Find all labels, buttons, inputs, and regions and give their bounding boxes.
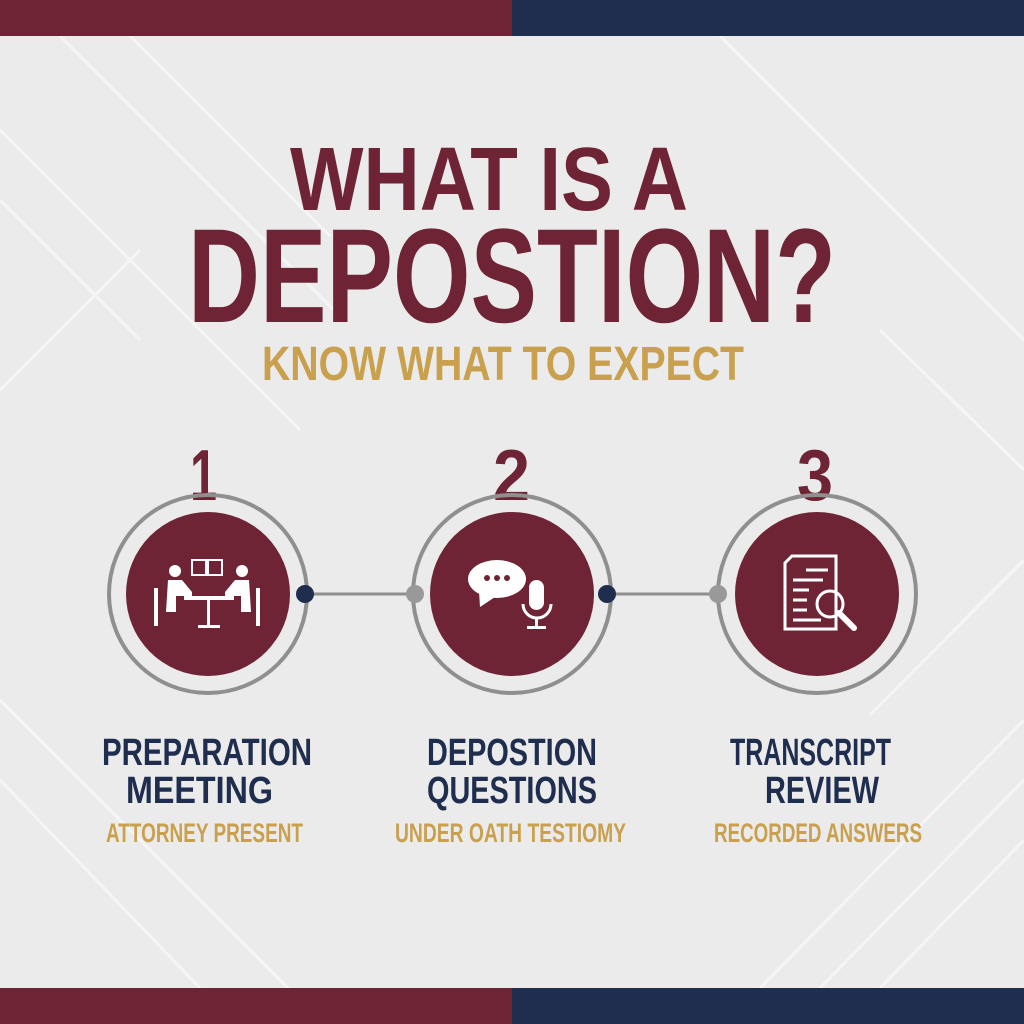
connector lines <box>305 592 718 596</box>
step 2: 2 <box>493 436 530 516</box>
label 1: PREPARATION <box>102 732 312 774</box>
label 1: ATTORNEY PRESENT <box>106 818 303 848</box>
step 1: 1 <box>190 436 217 516</box>
connector dots <box>296 585 727 603</box>
bottom bar <box>0 988 1024 1024</box>
label 1 <box>102 732 312 848</box>
label 3 <box>714 732 922 848</box>
subtitle: KNOW WHAT TO EXPECT <box>262 338 744 391</box>
title: WHAT IS A <box>290 130 688 230</box>
label 3: TRANSCRIPT <box>730 732 891 774</box>
label 1: MEETING <box>126 770 273 812</box>
label 2: DEPOSTION <box>427 732 597 774</box>
label 2 <box>395 732 626 848</box>
title <box>188 130 836 351</box>
label 3: RECORDED ANSWERS <box>714 818 922 848</box>
step 2 <box>413 436 611 693</box>
icon: document with magnifier <box>785 556 854 629</box>
step 3 <box>718 436 916 693</box>
icon: meeting at table <box>156 560 258 628</box>
icon: speech bubble and microphone <box>468 560 551 629</box>
label 3: REVIEW <box>765 770 879 812</box>
label 2: QUESTIONS <box>427 770 597 812</box>
step 1 <box>109 436 307 693</box>
top bar <box>0 0 1024 36</box>
step 3: 3 <box>797 436 833 516</box>
label 2: UNDER OATH TESTIOMY <box>395 818 626 848</box>
